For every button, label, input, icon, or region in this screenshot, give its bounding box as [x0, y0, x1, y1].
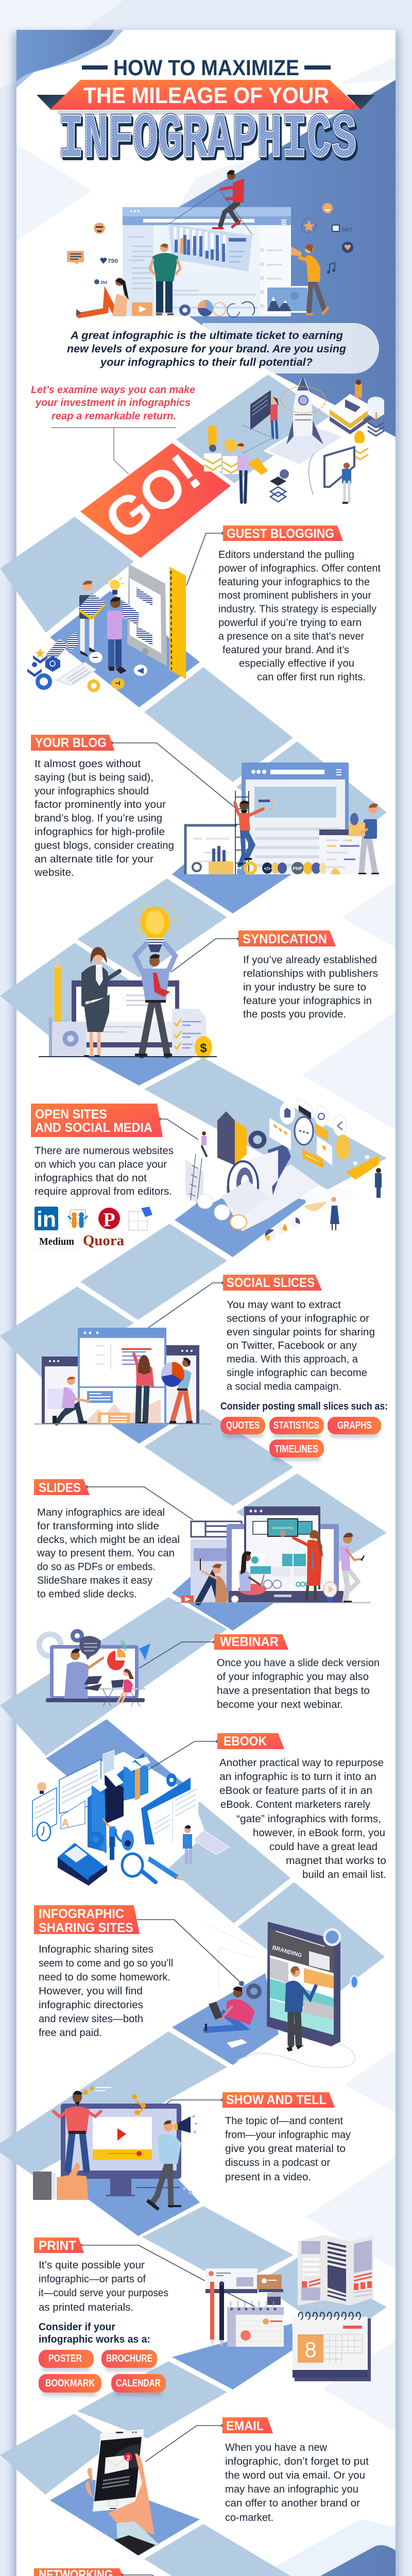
pill: timelines: TIMELINES [274, 1444, 318, 1455]
tech coins: </> [264, 866, 271, 871]
tag: SOCIAL SLICES [227, 1276, 315, 1290]
ground line [178, 1602, 371, 1603]
body text: and review sites—both [39, 2013, 143, 2025]
pill: calendar [111, 2374, 166, 2393]
bold prompt: Consider posting small slices such as: [220, 1401, 388, 1412]
notebook [227, 2301, 284, 2347]
pill: graphs [328, 1417, 381, 1434]
books [88, 1753, 150, 1854]
logo: medium [35, 1234, 79, 1249]
tag: YOUR BLOG [35, 736, 107, 750]
floating small icons [27, 630, 147, 690]
body text: When you have a new [225, 2442, 328, 2453]
section: social slices [34, 1275, 388, 1461]
social icons floating around hero: 354 [100, 280, 108, 285]
illustration: books and pages [32, 1750, 229, 1886]
tag: EMAIL [226, 2419, 264, 2433]
body text: become your next webinar. [217, 1699, 343, 1710]
illustration: phone with infographic: BRANDING [271, 1944, 302, 1959]
illustration: laptop with slides and people [178, 1506, 371, 1603]
body text: give you great material to [225, 2143, 346, 2155]
social icons floating around hero: 567 [342, 227, 353, 233]
calendar [293, 2312, 371, 2381]
presenters and board [237, 443, 354, 504]
body text: featuring your infographics to the [218, 577, 370, 588]
body text: of your infographic you may also [217, 1671, 369, 1683]
body text: seem to come and go so you’ll [39, 1958, 173, 1969]
connector [145, 2424, 224, 2462]
body text: featured your brand. And it’s [222, 645, 349, 656]
pill: bookmark: BOOKMARK [45, 2378, 95, 2389]
left window [42, 1357, 78, 1424]
body text: guest blogs, consider creating [35, 840, 174, 851]
section: guest blogging [27, 526, 381, 690]
title line: how to maximize: HOW TO MAXIMIZE [113, 56, 299, 80]
body text: the posts you provide. [243, 1009, 346, 1020]
body text [39, 1944, 173, 2039]
body text: infographic, don’t forget to put [225, 2456, 369, 2467]
red lead-in text with connector [31, 384, 195, 474]
pill: poster: POSTER [48, 2353, 82, 2364]
pencil [55, 959, 61, 1030]
man holding documents [78, 581, 106, 657]
body text: way to present them. You can [37, 1548, 175, 1559]
body text: eBook or feature parts of it in an [219, 1785, 372, 1797]
body text: from—your infographic may [225, 2129, 351, 2141]
body text: You may want to extract [227, 1299, 341, 1311]
body text: an infographic is to turn it into an [219, 1771, 376, 1783]
icon: puzzle [129, 1207, 152, 1230]
body text: present in a video. [225, 2172, 311, 2183]
sleeve [116, 2521, 160, 2546]
pill: quotes: QUOTES [226, 1420, 260, 1431]
body text: even singular points for sharing [227, 1327, 375, 1338]
body text: sections of your infographic or [227, 1313, 369, 1324]
rocket launch illustration [204, 376, 384, 504]
tag: SLIDES [39, 1481, 81, 1495]
pill: timelines [269, 1439, 324, 1458]
man in pink shirt [107, 597, 139, 674]
man gesturing [54, 2091, 101, 2170]
body text: your infographics should [35, 786, 149, 797]
intro text: your infographics to their full potential? [100, 357, 313, 368]
intro text: new levels of exposure for your brand. Are you using [67, 343, 346, 355]
pill: quotes [220, 1417, 265, 1434]
tag [34, 1905, 140, 1935]
body text [227, 1299, 375, 1392]
seated woman at desk [99, 1669, 145, 1706]
phone [93, 2429, 144, 2512]
body text: power of infographics. Offer content [218, 563, 381, 574]
body text [219, 1757, 386, 1880]
body text: however, in eBook form, you [253, 1827, 385, 1839]
connector [85, 1485, 193, 1520]
body text: website. [34, 867, 74, 878]
body text: have a presentation that begs to [217, 1685, 370, 1697]
hand [108, 2453, 154, 2535]
pill buttons [39, 2350, 166, 2396]
body text: There are numerous websites [35, 1145, 174, 1157]
document panels: A [62, 1818, 69, 1829]
section: ebook [32, 1733, 386, 1886]
stacked platforms [330, 380, 384, 436]
logo: medium: Medium [39, 1236, 74, 1247]
play button [132, 302, 152, 316]
tag: GUEST BLOGGING [227, 527, 334, 541]
body text: a presence on a site that’s never [218, 631, 364, 642]
body text: build an email list. [302, 1869, 386, 1880]
seated person with laptop [205, 1987, 255, 2048]
body text: It’s quite possible your [39, 2260, 145, 2271]
tag [31, 1104, 163, 1137]
illustration: megaphone and social icons [185, 1097, 382, 1241]
man with pie chart [161, 1358, 193, 1424]
illustration: bulb, monitor, business people [39, 903, 217, 1059]
connector [148, 1281, 225, 1328]
body text: brand’s blog. If you’re using [35, 813, 162, 824]
pie tokens [265, 1217, 301, 1241]
connector [121, 2573, 235, 2576]
tech coins [245, 862, 341, 874]
illustration: browser windows and people [34, 1328, 212, 1425]
bold prompt: infographic works as a: [39, 2334, 150, 2345]
book stack [58, 1843, 107, 1886]
body text: for transforming into slide [37, 1520, 159, 1532]
body text: powerful if you’re trying to earn [218, 617, 362, 629]
body text: free and paid. [39, 2027, 102, 2039]
person in green shirt [150, 243, 180, 315]
section: email [85, 2417, 369, 2555]
ladder [235, 791, 249, 874]
social icons floating around hero: 750 [108, 258, 118, 264]
browser window [123, 207, 291, 316]
connector [137, 1920, 244, 1986]
body text [37, 1507, 180, 1600]
body text: especially effective if you [239, 658, 354, 669]
brochure [298, 2235, 373, 2306]
phone: 2 [126, 2454, 130, 2462]
main window [78, 1328, 166, 1425]
body text: in your industry be sure to [243, 981, 366, 993]
red lead-in text with connector: reap a remarkable return. [52, 411, 176, 422]
megaphone [228, 1144, 291, 1209]
body text: infographics that do not [35, 1173, 147, 1184]
tag: INFOGRAPHIC [39, 1907, 124, 1921]
logo: quora: Quora [83, 1232, 124, 1249]
illustration: print materials [205, 2235, 373, 2381]
checklist and coin [172, 1009, 212, 1059]
body text: It almost goes without [35, 758, 141, 770]
pill: brochure [101, 2350, 157, 2368]
illustration: phone with infographic [205, 1922, 358, 2067]
body text: eBook. Content marketers rarely [220, 1799, 370, 1810]
illustration: hand holding phone [85, 2429, 160, 2555]
body text: on which you can place your [35, 1159, 167, 1170]
slide thumbnails [250, 1519, 312, 1588]
body text: The topic of—and content [225, 2115, 343, 2127]
man with sweater [285, 1966, 316, 2052]
intro text: A great infographic is the ultimate ticket to earning [70, 330, 343, 342]
body text [35, 1145, 174, 1197]
pill: statistics: STATISTICS [273, 1420, 319, 1431]
body text: can offer first run rights. [257, 672, 366, 683]
body text: “gate” infographics with forms, [236, 1814, 381, 1825]
bold prompt [39, 2321, 150, 2345]
body text: it—could serve your purposes [39, 2287, 168, 2299]
tag: SHARING SITES [39, 1921, 133, 1935]
tag [217, 1733, 284, 1749]
body text: SlideShare makes it easy [37, 1575, 152, 1586]
body text: need to do some homework. [39, 1972, 170, 1983]
hero illustration [67, 170, 353, 317]
body text: Another practical way to repurpose [219, 1757, 384, 1769]
right window [166, 1345, 199, 1424]
body text: decks, which might be an ideal [37, 1534, 180, 1546]
calendar: 8 [304, 2337, 317, 2362]
magnifier and pencil [122, 1854, 183, 1882]
illustration: phone, people, icons [27, 564, 186, 690]
woman reaching [134, 1354, 152, 1424]
person at books [103, 1819, 125, 1860]
ground line [39, 1056, 217, 1057]
cards and bar [205, 2268, 283, 2305]
section: slides [34, 1479, 371, 1603]
photo frame [266, 286, 309, 313]
pill: bookmark [39, 2374, 101, 2393]
ribbon: the mileage of your [37, 80, 375, 110]
person in red sweater pulling strings [168, 170, 252, 235]
person reading [183, 1825, 229, 1864]
pill: calendar: CALENDAR [116, 2378, 161, 2389]
platform logos [35, 1207, 152, 1249]
pill: brochure: BROCHURE [106, 2353, 152, 2364]
seated woman with laptop [238, 1551, 266, 1595]
checklist and coin: $ [200, 1041, 207, 1055]
connector [139, 1640, 216, 1668]
logo: linkedin: in [37, 1207, 56, 1232]
connector [158, 1117, 198, 1140]
ground line [34, 1423, 212, 1425]
man with megaphone [136, 2115, 197, 2211]
tag: OPEN SITES [35, 1107, 107, 1122]
bulb [106, 573, 124, 595]
hand back fingers [85, 2468, 93, 2499]
body text: the word out via email. Or you [225, 2470, 365, 2481]
gear and stamp [90, 1830, 134, 1851]
connector [186, 532, 225, 586]
sub window [319, 829, 375, 874]
connector [148, 1740, 219, 1770]
gear box [49, 1018, 87, 1056]
left small window [185, 825, 237, 874]
body text: infographic directories [39, 1999, 143, 2011]
illustration: monitor with presenter [39, 1631, 150, 1706]
document panels [32, 1750, 114, 1841]
gear [248, 1986, 260, 1997]
pill: statistics [269, 1417, 324, 1434]
section: your blog [31, 735, 379, 878]
body text: as printed materials. [39, 2302, 133, 2313]
body text [39, 2260, 168, 2313]
intro text [67, 330, 346, 368]
section: webinar [39, 1631, 380, 1710]
chart card with bars [168, 224, 252, 272]
body text [225, 2115, 351, 2183]
woman in blue dress [330, 1197, 339, 1230]
body text: industry. This strategy is especially [218, 604, 376, 615]
white floor area [32, 1752, 206, 1886]
body text: media. With this approach, a [227, 1354, 358, 1365]
tag: EBOOK [224, 1734, 267, 1749]
pill: graphs: GRAPHS [337, 1420, 372, 1431]
bulb token [323, 1582, 337, 1602]
logo: pinterest: P [103, 1209, 115, 1231]
body text: on Twitter, Facebook or any [227, 1340, 357, 1351]
connector [171, 937, 240, 972]
coins and phone base [197, 1180, 354, 1229]
section: print [34, 2235, 373, 2396]
logo: slideshare [68, 1210, 88, 1226]
connector [167, 2098, 224, 2104]
gear icon [251, 1133, 264, 1146]
section: networking [33, 2568, 391, 2576]
body text: require approval from editors. [35, 1186, 172, 1197]
seated man with phone [181, 1558, 238, 1603]
woman at dark screen [242, 390, 279, 453]
body text: However, you will find [39, 1986, 143, 1997]
body text: If you’ve already established [243, 955, 377, 966]
red lead-in text with connector: Let’s examine ways you can make [31, 384, 195, 396]
pencil and pen [210, 2281, 224, 2347]
body text: factor prominently into your [35, 799, 166, 810]
tag: PRINT [39, 2239, 76, 2253]
body text: Once you have a slide deck version [217, 1657, 380, 1669]
body text: discuss in a podcast or [225, 2157, 330, 2168]
section: syndication [39, 903, 378, 1059]
bulbs on stacks [204, 425, 368, 475]
kneeling man [53, 1377, 89, 1424]
tech coins: PHP [293, 866, 302, 871]
floating social bubbles [269, 1097, 379, 1212]
woman presenting [294, 1530, 323, 1600]
pill buttons [220, 1417, 381, 1461]
body text: relationships with publishers [243, 968, 378, 979]
tag: AND SOCIAL MEDIA [35, 1121, 152, 1135]
rocket [281, 376, 325, 445]
painter on ladder [235, 800, 272, 866]
illustration: browser, painter, developer [185, 762, 379, 874]
open book page [141, 1773, 198, 1850]
illustration: monitor with video [33, 2087, 197, 2211]
pill background [202, 323, 379, 374]
man lifting bulb [135, 944, 178, 1057]
section: open sites and social media [31, 1097, 382, 1249]
body text: co-market. [225, 2512, 273, 2523]
body text: magnet that works to [286, 1855, 386, 1867]
person with box [349, 804, 379, 874]
body text [243, 955, 378, 1020]
red lead-in text with connector: your investment in infographics [35, 397, 191, 409]
body text: most prominent publishers in your [218, 590, 371, 601]
body text: single infographic can become [227, 1367, 367, 1379]
body text: saying (but is being said), [35, 772, 153, 783]
thumbs-up hand [33, 2163, 88, 2200]
bulb held up [133, 903, 177, 952]
slide thumbnails: INFOGRAPHIC [272, 1527, 294, 1530]
person with megaphone [291, 244, 330, 315]
body text [218, 549, 381, 683]
share nodes [83, 2087, 146, 2115]
standing man with phone [340, 1533, 365, 1603]
body text [34, 758, 174, 878]
body text: infographic—or parts of [39, 2274, 146, 2285]
pill: poster [39, 2350, 94, 2368]
phone platform [265, 424, 344, 465]
tag: SYNDICATION [243, 932, 327, 946]
body text: infographics for high-profile [35, 826, 165, 838]
title block [37, 56, 375, 178]
body text: a social media campaign. [227, 1381, 341, 1392]
ribbon: the mileage of your: THE MILEAGE OF YOUR [83, 83, 329, 108]
intro callout [67, 323, 379, 374]
body text: could have a great lead [269, 1841, 377, 1853]
body text: do so as PDFs or embeds. [37, 1562, 156, 1573]
body text: may have an infographic you [225, 2484, 358, 2495]
body text: Editors understand the pulling [218, 549, 354, 561]
connector [110, 741, 235, 808]
bold prompt: Consider if your [39, 2321, 115, 2333]
woman in suit [83, 947, 119, 1057]
body text: can offer to another brand or [225, 2498, 360, 2509]
section: infographic sharing sites [34, 1905, 358, 2067]
tag: SHOW AND TELL [226, 2093, 327, 2107]
presenter [64, 1649, 103, 1699]
body text: Many infographics are ideal [37, 1507, 165, 1518]
body text: an alternate title for your [35, 854, 153, 865]
social icons floating around hero [67, 203, 353, 285]
body text: Infographic sharing sites [39, 1944, 153, 1955]
GO! diamond: GO! [94, 442, 212, 552]
body text [217, 1657, 380, 1710]
body text: to embed slide decks. [37, 1588, 137, 1600]
connector [79, 2244, 255, 2307]
body text [225, 2442, 369, 2523]
dark cuff [114, 2535, 156, 2555]
logo: pinterest [98, 1208, 120, 1231]
body text: feature your infographics in [243, 995, 372, 1007]
seated woman [76, 278, 129, 316]
person on platform [375, 1168, 382, 1198]
tag: WEBINAR [220, 1635, 279, 1649]
section: show and tell [33, 2087, 351, 2211]
gear and pie icons [181, 300, 254, 317]
